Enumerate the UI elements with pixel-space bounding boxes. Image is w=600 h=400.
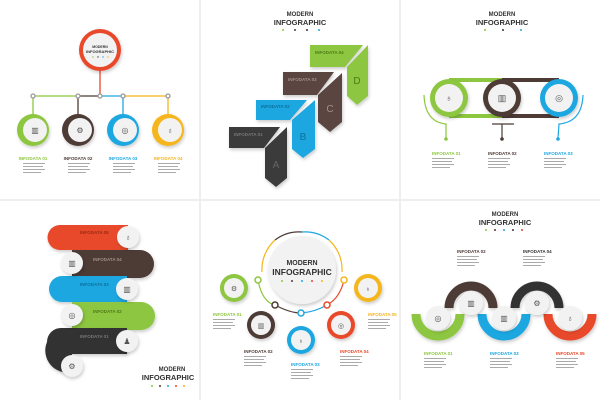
panel: S-shaped bands: ⚙ xyxy=(68,362,76,371)
step B: INFODATA 02 xyxy=(261,104,290,109)
panel: S-shaped bands: ♁ xyxy=(125,233,131,242)
circles xyxy=(430,79,578,117)
title: INFOGRAPHIC xyxy=(274,18,327,27)
labels: INFODATA 01 xyxy=(213,312,242,317)
band labels: INFODATA 02 xyxy=(93,309,122,314)
circles xyxy=(61,226,139,377)
panel: central circle with satellites: ♁ xyxy=(365,286,371,293)
band labels: INFODATA 05 xyxy=(80,230,109,235)
panel: central circle with satellites: INFODATA 03 xyxy=(291,362,320,367)
panel: S-shaped bands: ▥ xyxy=(68,259,76,268)
connector dots xyxy=(255,277,347,316)
title: MODERN xyxy=(489,12,515,18)
satellite circles xyxy=(220,274,382,354)
step C: C xyxy=(326,104,334,115)
panel: wave half-rings: INFODATA 05 xyxy=(556,351,585,356)
title: MODERN xyxy=(492,212,518,218)
title: INFOGRAPHIC xyxy=(142,373,195,382)
panel: wave half-rings: ▥ xyxy=(467,299,475,308)
bands xyxy=(449,80,559,116)
labels: INFODATA 01 xyxy=(432,151,461,156)
step A xyxy=(229,127,287,187)
dark band xyxy=(45,328,127,373)
band labels: INFODATA 04 xyxy=(93,257,122,262)
top circle: modern infographic: INFOGRAPHIC xyxy=(86,49,114,54)
top circle: modern infographic: MODERN xyxy=(92,45,108,49)
panel: pill connected circles: ▥ xyxy=(498,93,506,103)
panel: central circle with satellites: ♁ xyxy=(298,338,304,345)
step A: INFODATA 01 xyxy=(234,132,263,137)
panel: hierarchy tree: ♁ xyxy=(167,126,173,135)
panel: hierarchy tree: ◎ xyxy=(122,126,129,135)
panel: wave half-rings: ⚙ xyxy=(533,299,541,308)
panel: pill connected circles xyxy=(424,12,583,168)
panel: ABCD arrows xyxy=(229,12,368,187)
panel: wave half-rings: ♁ xyxy=(567,314,573,323)
band labels: INFODATA 03 xyxy=(80,282,109,287)
panel: hierarchy tree: INFODATA 03 xyxy=(109,156,138,161)
title: MODERN xyxy=(159,367,185,373)
panel: S-shaped bands xyxy=(45,225,195,387)
panel: S-shaped bands: ◎ xyxy=(69,311,76,320)
red band xyxy=(47,225,128,250)
panel: central circle with satellites: ⚙ xyxy=(231,285,237,293)
panel: S-shaped bands: ▥ xyxy=(123,285,131,294)
panel: wave half-rings: INFODATA 03 xyxy=(490,351,519,356)
step D: INFODATA 04 xyxy=(315,50,344,55)
central circle: INFOGRAPHIC xyxy=(272,267,332,277)
panel: wave half-rings xyxy=(416,212,592,368)
step B xyxy=(256,100,315,158)
connector lines xyxy=(31,71,170,115)
labels: INFODATA 01 xyxy=(424,351,453,356)
step A: A xyxy=(273,160,280,171)
panel: S-shaped bands: ♟ xyxy=(123,337,131,346)
panel: hierarchy tree xyxy=(17,29,184,173)
panel: wave half-rings: ◎ xyxy=(435,314,442,323)
panel: wave half-rings: INFODATA 04 xyxy=(523,249,552,254)
circles xyxy=(426,291,582,330)
band labels: INFODATA 01 xyxy=(80,334,109,339)
panel: hierarchy tree: INFODATA 02 xyxy=(64,156,93,161)
panel: hierarchy tree: ⚙ xyxy=(76,126,84,135)
title: INFOGRAPHIC xyxy=(479,218,532,227)
title xyxy=(479,212,532,231)
step D: D xyxy=(353,76,361,87)
title xyxy=(142,367,195,387)
brown band xyxy=(72,250,154,278)
title xyxy=(274,12,327,31)
panel: hierarchy tree: INFODATA 04 xyxy=(154,156,183,161)
circles row xyxy=(17,114,184,146)
pointers xyxy=(424,95,583,138)
panel: pill connected circles: INFODATA 02 xyxy=(488,151,517,156)
panel: pill connected circles: INFODATA 03 xyxy=(544,151,573,156)
central circle xyxy=(268,236,336,304)
panel: central circle with satellites: INFODATA 02 xyxy=(244,349,273,354)
green band xyxy=(72,302,155,330)
panel: hierarchy tree: ▥ xyxy=(31,126,39,135)
step C: INFODATA 03 xyxy=(288,77,317,82)
blue band xyxy=(49,276,127,302)
labels: INFODATA 01 xyxy=(19,156,48,161)
central circle: MODERN xyxy=(286,260,318,267)
panel: central circle with satellites: INFODATA 04 xyxy=(340,349,369,354)
title: INFOGRAPHIC xyxy=(476,18,529,27)
top circle: modern infographic xyxy=(79,29,121,71)
title xyxy=(476,12,529,31)
band labels xyxy=(80,230,122,339)
half rings xyxy=(416,286,592,336)
panel: wave half-rings: INFODATA 02 xyxy=(457,249,486,254)
panel: central circle with satellites: ▥ xyxy=(258,323,264,330)
arcs xyxy=(258,232,344,313)
panel: pill connected circles: ◎ xyxy=(555,93,563,103)
panel: central circle with satellites: INFODATA 05 xyxy=(368,312,397,317)
panel: central circle with satellites: ◎ xyxy=(338,323,344,330)
panel: central circle with satellites xyxy=(213,232,397,379)
step B: B xyxy=(300,132,307,143)
panel: wave half-rings: ▥ xyxy=(500,314,508,323)
title: MODERN xyxy=(287,12,313,18)
step D xyxy=(310,45,368,105)
step C xyxy=(283,72,342,132)
panel: pill connected circles: ♁ xyxy=(446,93,452,103)
